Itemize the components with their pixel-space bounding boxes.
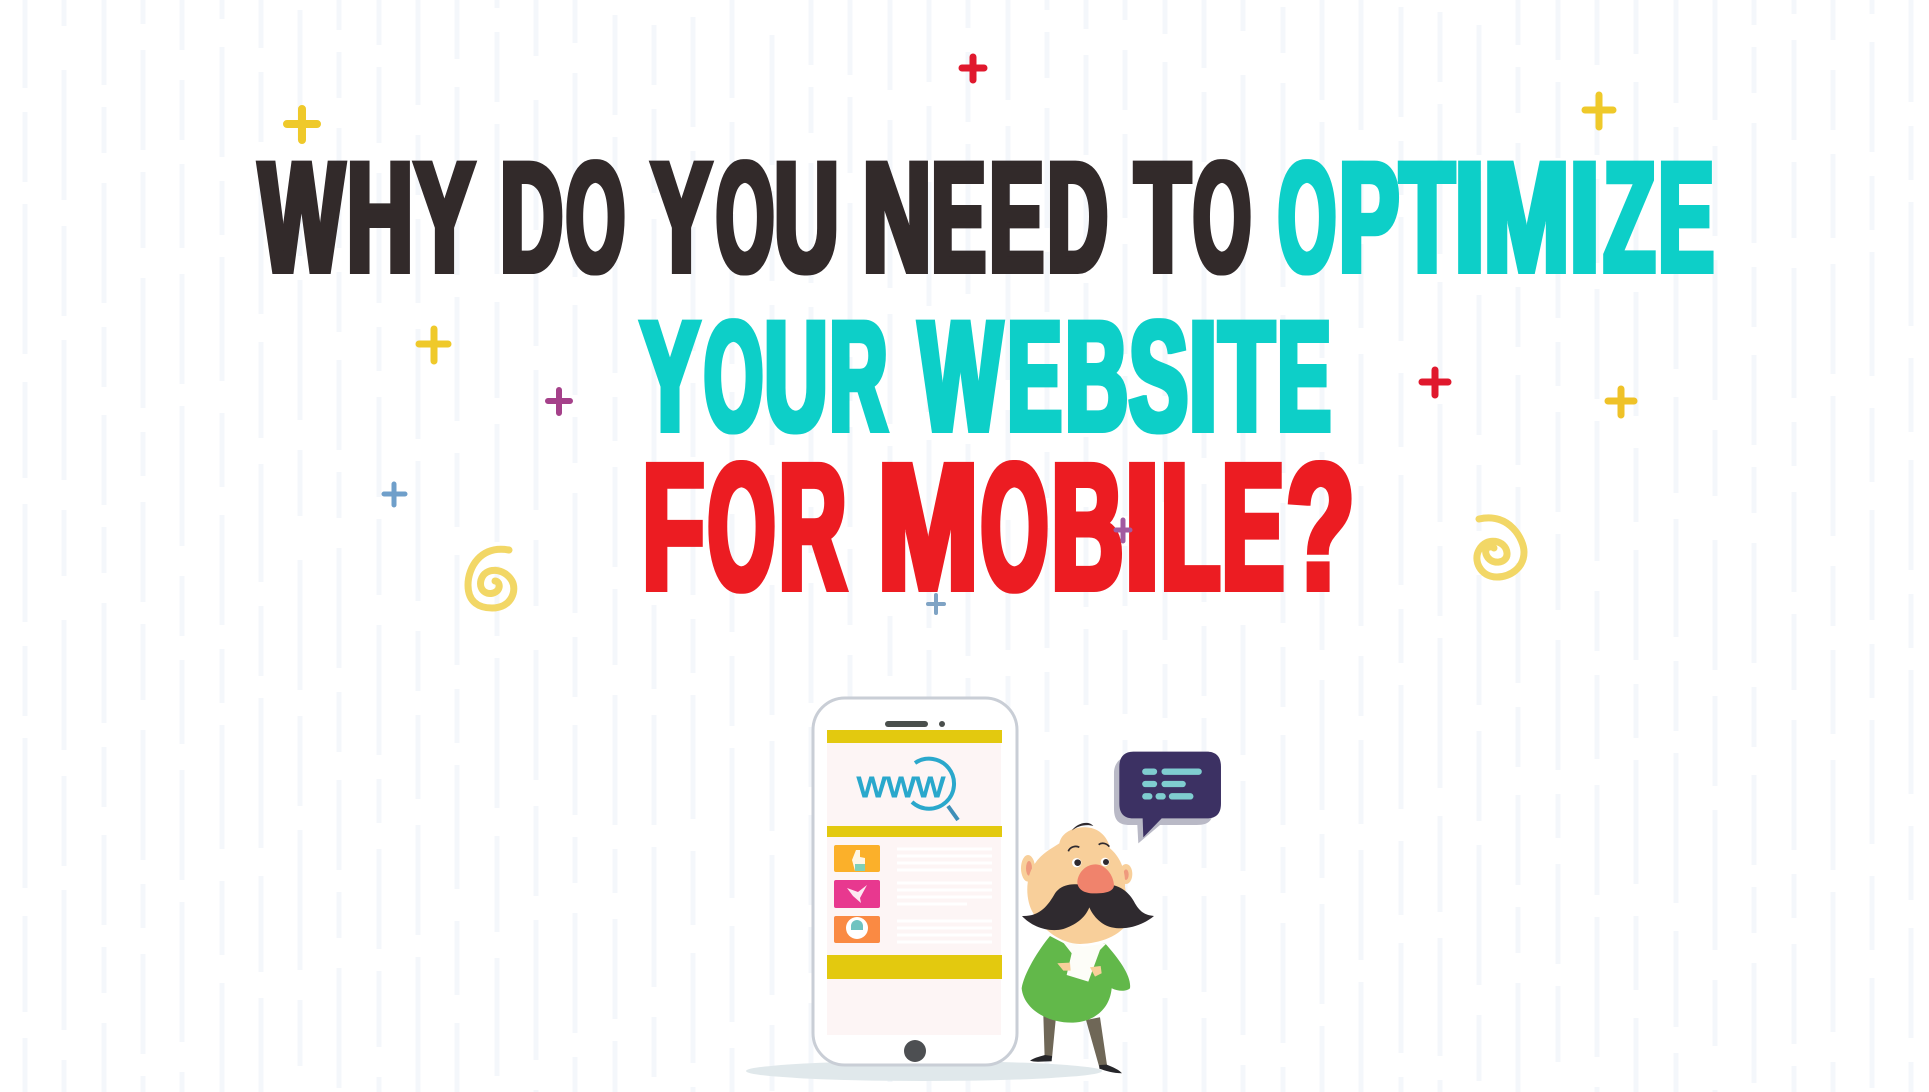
title line 2: your website: T: [1219, 290, 1274, 464]
title line 3: for mobile?: R: [779, 426, 846, 626]
title line 1: why do you need to optimize: D: [500, 131, 563, 305]
placeholder text lines: [897, 849, 992, 942]
speaker and camera: [885, 721, 945, 727]
title line 1: why do you need to optimize: T: [1135, 131, 1190, 305]
title line 3: for mobile?: [643, 426, 1354, 626]
plus: blue left: [384, 484, 405, 505]
title line 3: for mobile?: ?: [1287, 426, 1354, 626]
title: [259, 131, 1714, 626]
title line 1: why do you need to optimize: I: [1454, 131, 1484, 305]
title line 3: for mobile?: F: [643, 426, 704, 626]
title line 2: your website: U: [765, 290, 827, 464]
head: [1021, 823, 1154, 944]
title line 1: why do you need to optimize: I: [1570, 131, 1600, 305]
plus: purple on title: [1116, 520, 1130, 541]
title line 3: for mobile?: O: [981, 426, 1048, 626]
plus: red right: [1422, 370, 1448, 395]
title line 3: for mobile?: I: [1125, 426, 1159, 626]
title line 1: why do you need to optimize: D: [1048, 131, 1108, 305]
title line 1: why do you need to optimize: E: [1658, 131, 1714, 305]
home button: [904, 1040, 926, 1062]
title line 1: why do you need to optimize: E: [932, 131, 986, 305]
title line 3: for mobile?: L: [1161, 426, 1220, 626]
title line 2: your website: E: [1278, 290, 1331, 464]
icon tile: chart: [834, 916, 880, 943]
title line 2: your website: W: [919, 290, 1002, 464]
ground shadow: [746, 1061, 1102, 1081]
plus: red top: [962, 57, 984, 80]
plus: yellow right: [1608, 389, 1634, 415]
spiral: left: [468, 549, 514, 608]
title line 1: why do you need to optimize: M: [1484, 131, 1569, 305]
body and legs: [1022, 936, 1130, 1073]
title line 3: for mobile?: B: [1052, 426, 1123, 626]
phone screen: [827, 730, 1001, 1035]
www search logo: [856, 759, 958, 820]
www search logo: www: [856, 764, 946, 806]
title line 1: why do you need to optimize: E: [990, 131, 1044, 305]
title line 2: your website: Y: [641, 290, 699, 464]
middle bar: [827, 826, 1002, 837]
spiral: right: [1477, 518, 1524, 577]
title line 1: why do you need to optimize: P: [1339, 131, 1399, 305]
title line 1: why do you need to optimize: O: [716, 131, 774, 305]
title line 2: your website: O: [704, 290, 763, 464]
decorative plus signs: [287, 57, 1634, 613]
plus: yellow left: [419, 329, 448, 361]
title line 2: your website: I: [1189, 290, 1217, 464]
title line 3: for mobile?: M: [878, 426, 978, 626]
character: mustached mascot: [1021, 823, 1154, 1073]
title line 3: for mobile?: O: [708, 426, 775, 626]
title line 1: why do you need to optimize: Y: [415, 131, 474, 305]
footer bar: [827, 955, 1002, 979]
title line 1: why do you need to optimize: W: [259, 131, 344, 305]
icon tile: bird: [834, 880, 880, 908]
title line 1: why do you need to optimize: Z: [1604, 131, 1655, 305]
plus: yellow top right: [1585, 95, 1613, 127]
phone illustration: [813, 698, 1017, 1065]
title line 1: why do you need to optimize: [259, 131, 1714, 305]
title line 2: your website: E: [1008, 290, 1062, 464]
title line 2: your website: B: [1065, 290, 1128, 464]
title line 1: why do you need to optimize: T: [1400, 131, 1454, 305]
title line 1: why do you need to optimize: N: [863, 131, 931, 305]
title line 2: your website: S: [1129, 290, 1188, 464]
speech bubble: [1114, 752, 1221, 843]
header bar: [827, 730, 1002, 743]
title line 1: why do you need to optimize: O: [1193, 131, 1251, 305]
mustache: [1022, 884, 1154, 930]
title line 2: your website: [641, 290, 1331, 464]
title line 2: your website: R: [830, 290, 887, 464]
icon tile: hand: [834, 845, 880, 872]
title line 1: why do you need to optimize: Y: [652, 131, 711, 305]
nose: [1077, 864, 1114, 893]
plus: purple left: [548, 390, 570, 413]
title line 1: why do you need to optimize: U: [774, 131, 838, 305]
title line 3: for mobile?: E: [1222, 426, 1284, 626]
title line 1: why do you need to optimize: O: [1278, 131, 1336, 305]
title line 1: why do you need to optimize: H: [347, 131, 413, 305]
title line 1: why do you need to optimize: O: [566, 131, 625, 305]
phone body: [813, 698, 1017, 1065]
plus: yellow top left: [287, 109, 317, 140]
plus: blue under title: [928, 595, 944, 613]
